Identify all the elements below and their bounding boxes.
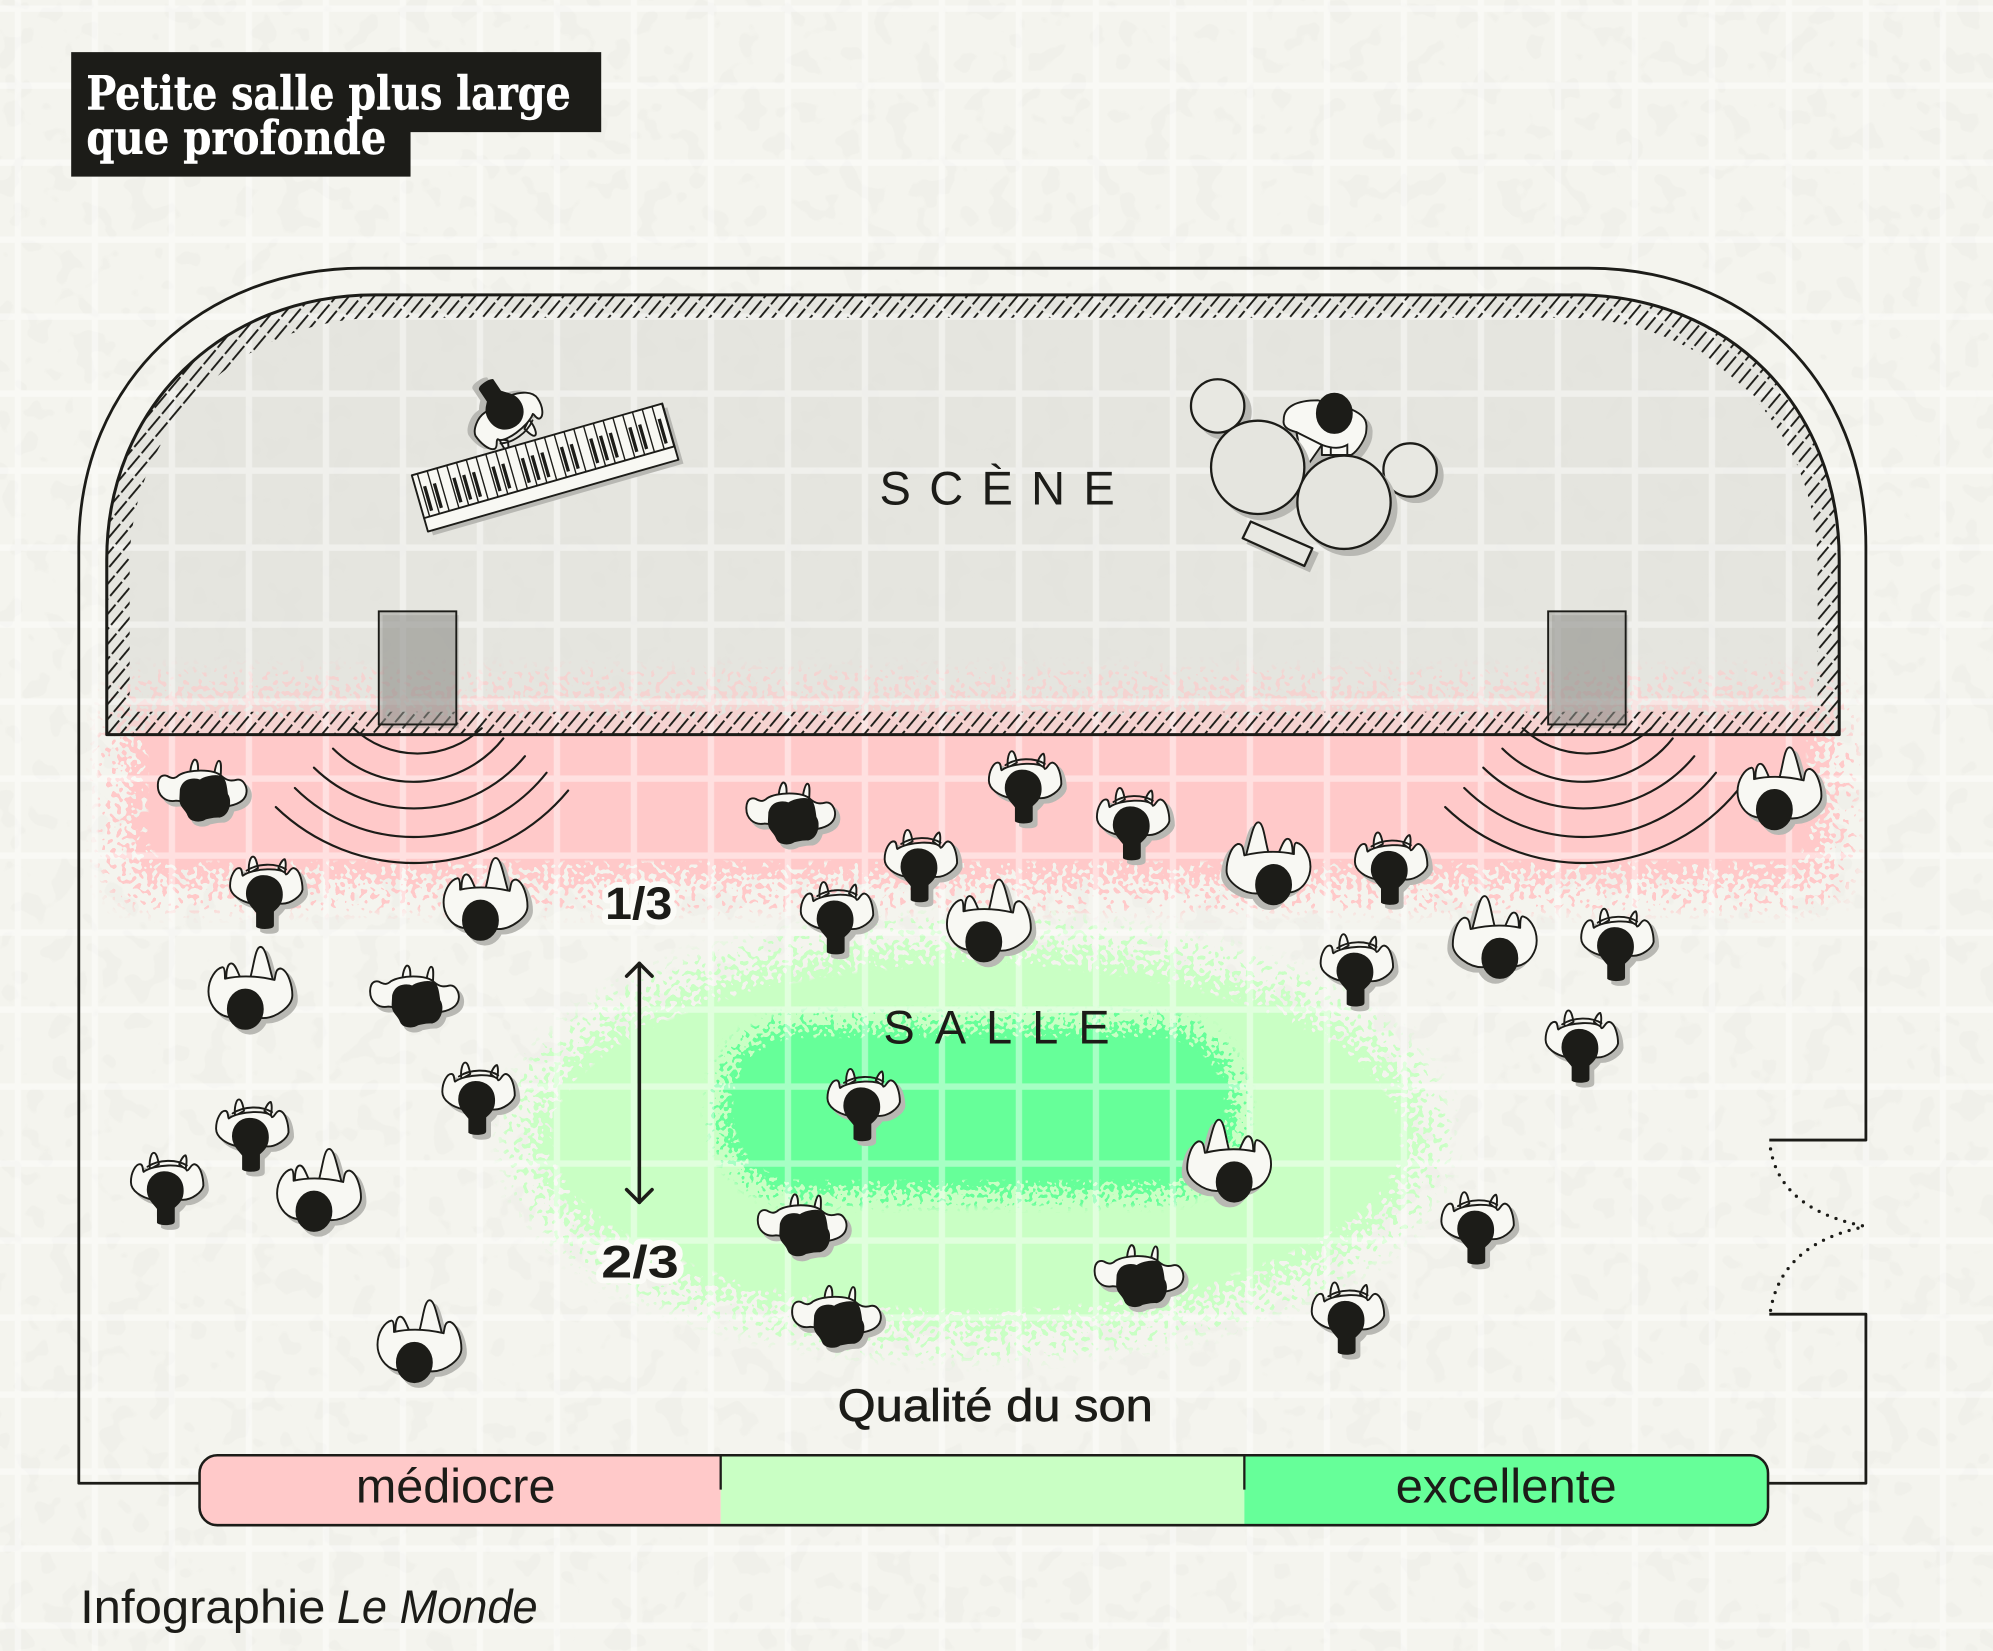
drum left bbox=[1217, 426, 1310, 519]
title: que profonde bbox=[86, 111, 386, 166]
person bbox=[1738, 747, 1826, 834]
person bbox=[156, 758, 253, 828]
audience bbox=[131, 747, 1826, 1387]
person bbox=[277, 1149, 365, 1236]
right speaker bbox=[1548, 611, 1628, 728]
stage label: SCÈNE bbox=[880, 462, 1115, 515]
stage hatching bbox=[107, 295, 1839, 735]
legend segment: excellent bbox=[1244, 1455, 1768, 1525]
person bbox=[1448, 896, 1537, 983]
person bbox=[1183, 1120, 1271, 1206]
drummer and drum kit bbox=[1191, 379, 1443, 571]
person bbox=[216, 1099, 293, 1176]
left speaker sound waves bbox=[276, 728, 568, 863]
credit: Le Monde bbox=[337, 1580, 538, 1633]
person bbox=[947, 880, 1035, 966]
pianist bbox=[448, 360, 554, 466]
pedal bbox=[1248, 527, 1317, 571]
keyboard bbox=[412, 402, 683, 536]
title bbox=[71, 52, 601, 177]
legend outline bbox=[200, 1455, 1768, 1525]
drum right bbox=[1303, 462, 1396, 555]
person bbox=[1097, 788, 1174, 864]
credit bbox=[80, 1580, 538, 1633]
legend title: Qualité du son bbox=[838, 1380, 1153, 1431]
person bbox=[442, 1063, 519, 1139]
legend segment: medium bbox=[721, 1455, 1244, 1525]
person bbox=[1546, 1010, 1622, 1087]
person bbox=[208, 947, 297, 1034]
panel: stage floor bbox=[107, 295, 1839, 735]
room outline with door gap bbox=[79, 268, 1866, 1483]
panel: stage edge bbox=[107, 295, 1839, 735]
person bbox=[131, 1153, 208, 1229]
room label: SALLE bbox=[883, 1000, 1110, 1053]
person bbox=[744, 781, 841, 851]
left speaker bbox=[379, 611, 459, 728]
drummer body bbox=[1289, 405, 1372, 475]
sound quality zone: poor (red, in front of the stage) bbox=[132, 703, 1823, 877]
person bbox=[1355, 832, 1432, 909]
person bbox=[1441, 1192, 1518, 1268]
arrow: one third / two thirds bbox=[627, 963, 652, 1202]
person bbox=[230, 857, 307, 933]
small cymbal left bbox=[1197, 385, 1251, 438]
person bbox=[1321, 934, 1398, 1010]
legend label: excellent: excellente bbox=[1396, 1459, 1617, 1513]
title: Petite salle plus large bbox=[86, 66, 571, 121]
drummer head bbox=[1317, 393, 1352, 433]
person bbox=[885, 830, 962, 906]
person bbox=[444, 858, 532, 945]
legend: sound quality bar bbox=[200, 1455, 1768, 1525]
credit: Infographie bbox=[80, 1580, 325, 1633]
legend segment: poor bbox=[200, 1455, 721, 1525]
sound quality zone: good (light green) bbox=[534, 949, 1418, 1326]
label: 2/3: 2/3 bbox=[601, 1236, 679, 1287]
legend label: poor: médiocre bbox=[356, 1459, 555, 1513]
person bbox=[989, 751, 1066, 827]
person bbox=[1581, 909, 1658, 985]
person bbox=[368, 964, 465, 1034]
door bbox=[1771, 1149, 1866, 1310]
right speaker sound waves bbox=[1445, 728, 1738, 863]
label: 1/3: 1/3 bbox=[605, 878, 672, 929]
person bbox=[790, 1284, 887, 1354]
person bbox=[801, 882, 878, 958]
legend ticks bbox=[721, 1455, 1244, 1490]
person bbox=[378, 1300, 466, 1387]
person bbox=[1312, 1282, 1389, 1359]
sound quality zone: excellent (bright green) bbox=[724, 1029, 1233, 1188]
stage outline bbox=[107, 295, 1839, 735]
small cymbal right bbox=[1389, 449, 1443, 502]
person bbox=[1222, 822, 1310, 909]
person bbox=[1093, 1243, 1189, 1314]
person bbox=[756, 1192, 852, 1263]
person bbox=[827, 1069, 904, 1145]
